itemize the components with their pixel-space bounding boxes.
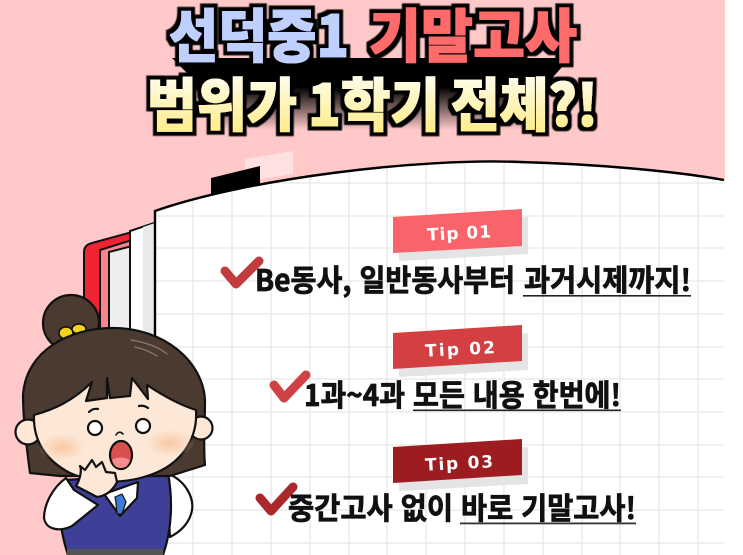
right arm bbox=[166, 473, 192, 537]
tip 02 text: 모든 내용 한번에! bbox=[413, 371, 621, 415]
hair bun bbox=[43, 295, 99, 351]
tip 01 text: 과거시제까지! bbox=[524, 256, 691, 300]
character: surprised student bbox=[16, 295, 212, 555]
cheek blush right bbox=[146, 429, 194, 457]
tip 02 text: 1과~4과 bbox=[304, 371, 405, 415]
hair highlight bbox=[131, 340, 167, 356]
face bbox=[34, 378, 196, 482]
title line 2: 1학기 bbox=[308, 59, 440, 143]
title drop shadow bbox=[172, 58, 570, 130]
hair scrunchie bbox=[59, 324, 86, 339]
tip 01 label: Tip 01 bbox=[427, 222, 492, 246]
left ear bbox=[16, 420, 40, 444]
tip 02 label: Tip 02 bbox=[425, 338, 496, 362]
translucent paper tab bbox=[245, 151, 293, 182]
right ear bbox=[190, 416, 212, 440]
hand bbox=[76, 460, 117, 497]
red notebook behind the page bbox=[84, 222, 157, 555]
title line 1 bbox=[169, 0, 577, 74]
tip 01 label bbox=[393, 209, 528, 261]
title line 2: 전체?! bbox=[451, 59, 598, 143]
tip 01 text bbox=[255, 256, 691, 300]
title line 2: 범위가 bbox=[147, 59, 297, 143]
nose bbox=[116, 432, 123, 435]
tip 03 check mark bbox=[260, 487, 293, 511]
tip 01 text: Be동사, 일반동사부터 bbox=[255, 256, 515, 300]
tip 02 label bbox=[393, 325, 528, 377]
left eye bbox=[88, 421, 102, 435]
tip 02 text bbox=[304, 371, 621, 415]
tip 02 check mark bbox=[274, 375, 306, 398]
tip 01 check mark bbox=[225, 261, 259, 284]
right eye bbox=[136, 419, 150, 433]
back hair bbox=[23, 328, 205, 476]
tie bbox=[115, 494, 126, 514]
eyebrows bbox=[89, 406, 148, 412]
tip 03 text: 중간고사 없이 bbox=[288, 484, 453, 528]
tip 03 label bbox=[393, 439, 528, 491]
tip 03 text bbox=[288, 484, 636, 528]
waistband bbox=[67, 549, 163, 555]
vest bbox=[60, 473, 171, 555]
title bbox=[147, 0, 598, 143]
grid notebook page bbox=[155, 150, 725, 555]
cheek blush left bbox=[38, 433, 86, 461]
shirt collar bbox=[104, 482, 138, 516]
tip 03 text: 바로 기말고사! bbox=[461, 484, 636, 528]
tip 03 label: Tip 03 bbox=[425, 452, 494, 476]
open mouth bbox=[110, 441, 132, 469]
black index tab bbox=[211, 166, 260, 200]
left sleeve bbox=[44, 478, 98, 529]
title line 2 bbox=[147, 59, 598, 143]
